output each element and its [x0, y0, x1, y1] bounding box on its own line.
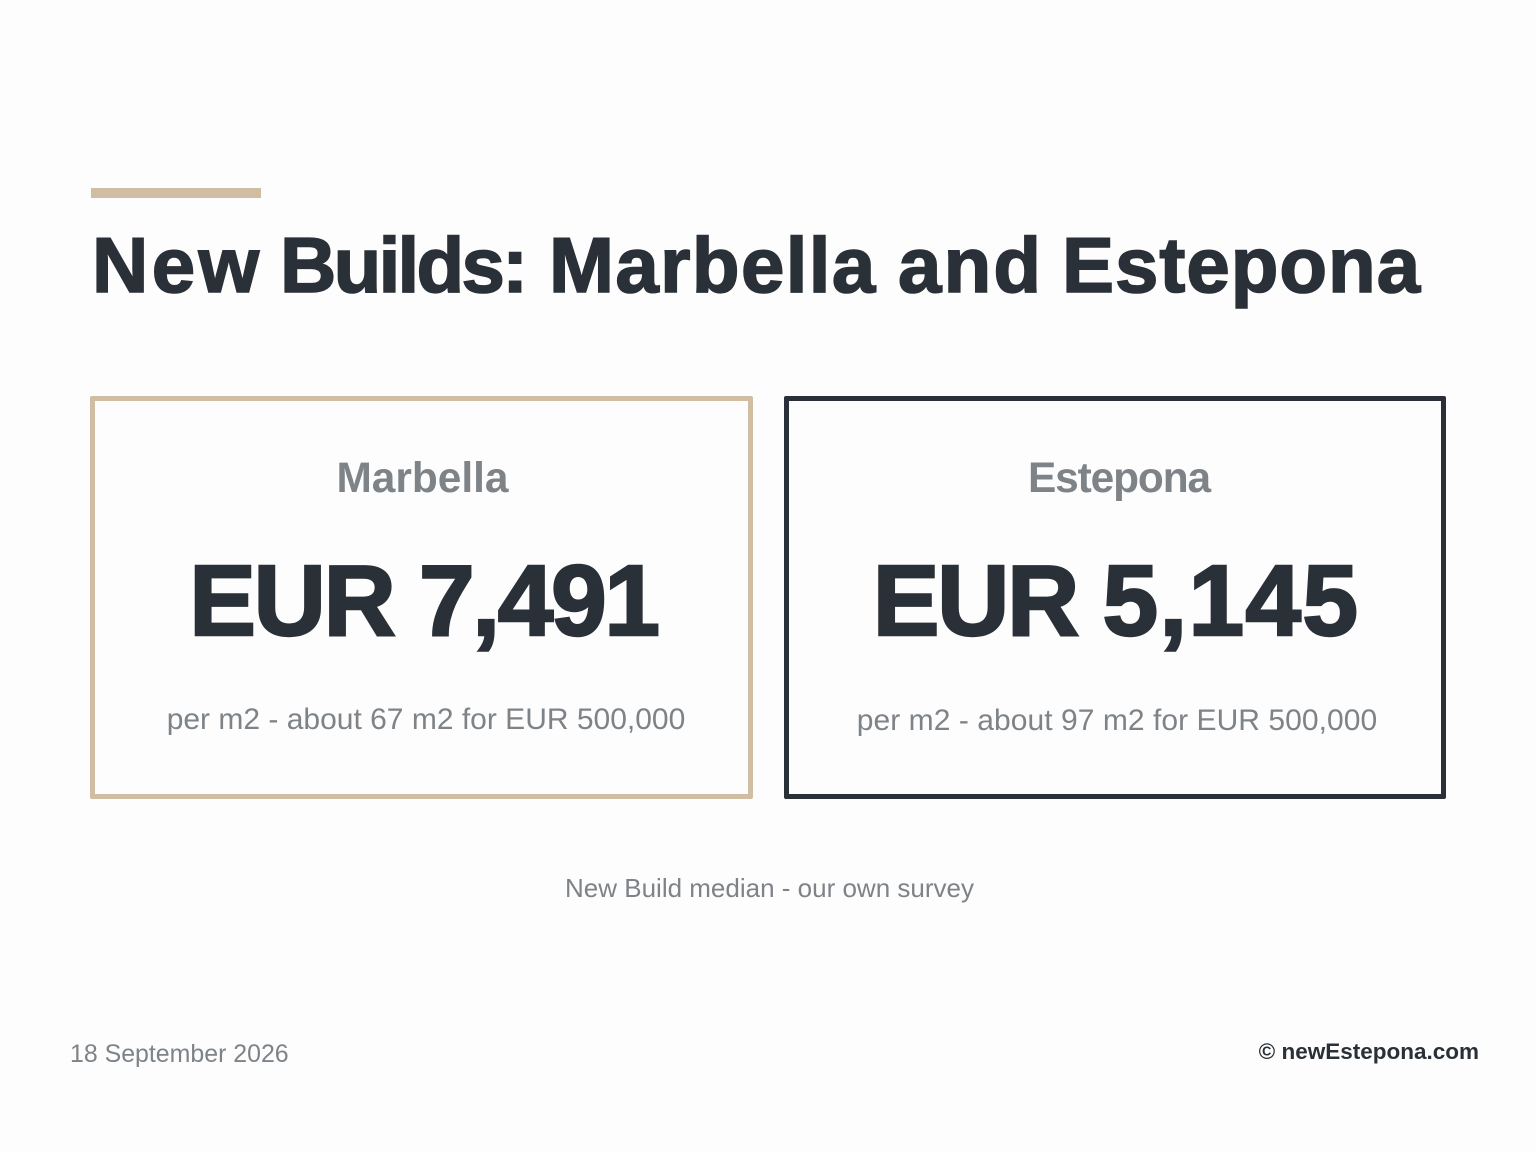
Estepona note: per m2 - about 97 m2 for EUR 500,000: [857, 704, 1377, 737]
date: 18 September 2026: [70, 1040, 289, 1068]
panel: Marbella: [90, 396, 753, 799]
accent bar: [91, 188, 261, 198]
title: New: [92, 221, 263, 309]
Estepona price: EUR 5,145: [873, 545, 1359, 657]
Estepona heading: Estepona: [1028, 454, 1210, 501]
panel: Estepona: [784, 396, 1446, 799]
source note: New Build median - our own survey: [565, 873, 974, 903]
title: Marbella: [549, 221, 877, 309]
title: Estepona: [1062, 221, 1421, 309]
Marbella price: EUR 7,491: [189, 545, 658, 657]
Marbella heading: Marbella: [336, 454, 508, 501]
copyright: © newEstepona.com: [1259, 1039, 1479, 1064]
title: [92, 221, 1422, 309]
title: Builds:: [280, 221, 525, 309]
Marbella note: per m2 - about 67 m2 for EUR 500,000: [167, 703, 685, 736]
title: and: [898, 221, 1043, 309]
